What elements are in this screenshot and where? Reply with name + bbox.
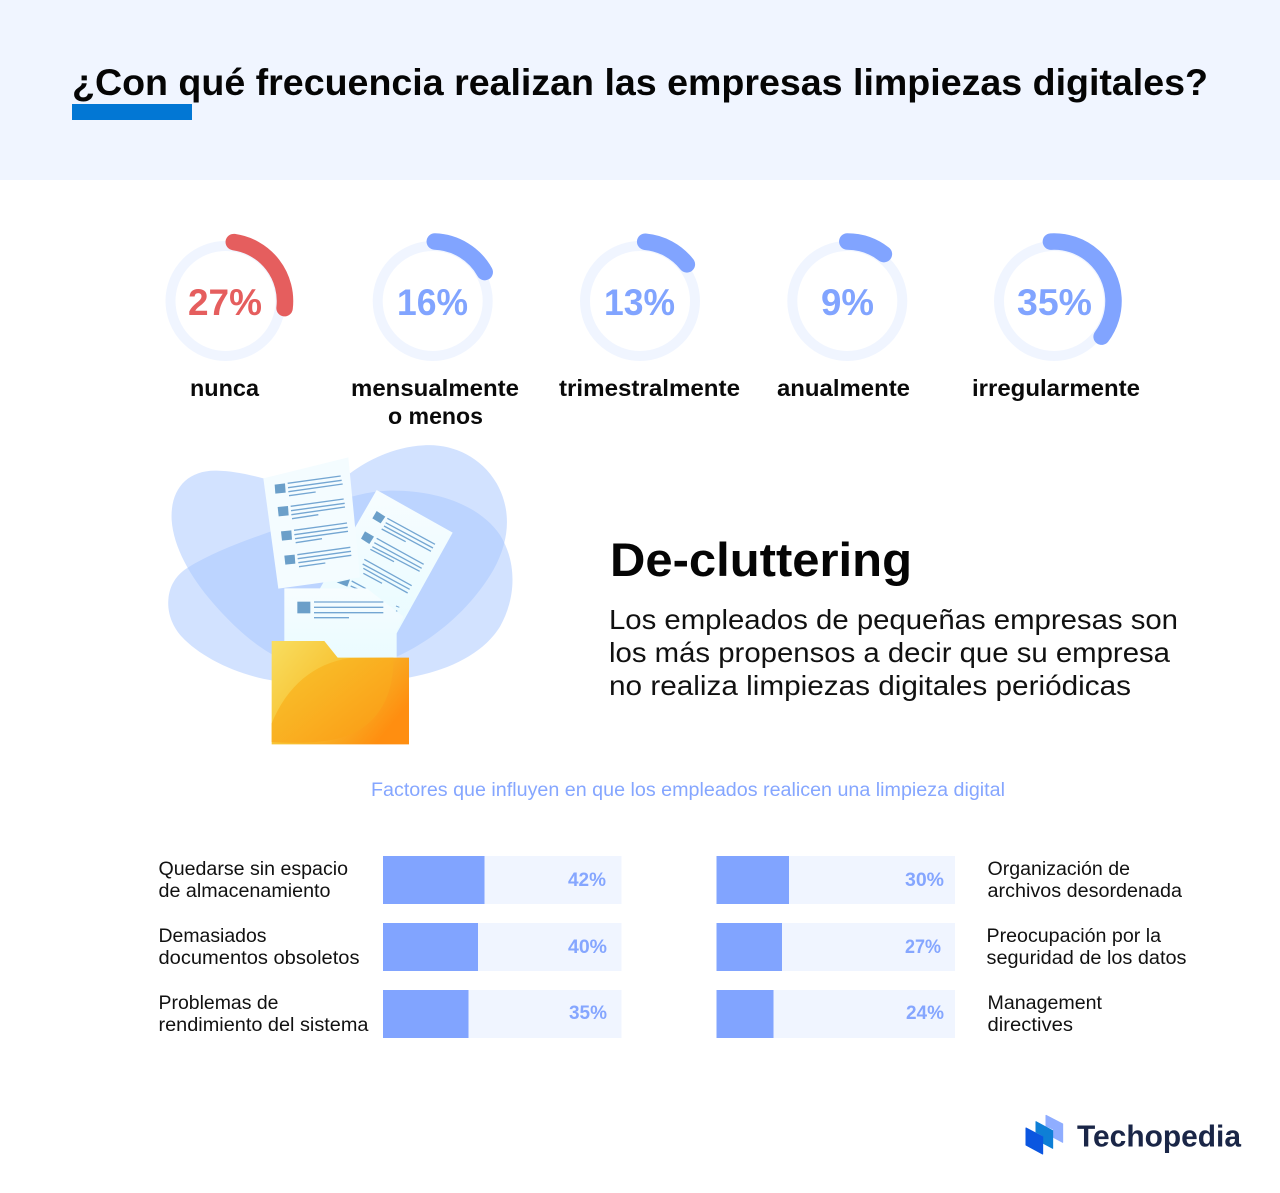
bar row: 35% [158, 990, 622, 1038]
label: mensualmente o menos: o menos [388, 403, 483, 429]
donut: nunca 27%: 27% [188, 282, 262, 323]
logo: Techopedia [1026, 1115, 1242, 1154]
bar row: 24% [716, 990, 1103, 1038]
paper: rotated right [320, 490, 453, 633]
bar row: 27% [716, 923, 1186, 971]
folder front highlight [272, 658, 393, 743]
bar row: 35%: Problemas de [158, 993, 278, 1014]
bar row: 42% [158, 856, 622, 904]
bar row: 35%: rendimiento del sistema [158, 1015, 369, 1036]
bar row: 27%: 27% [905, 937, 941, 958]
paper: upper left [263, 457, 360, 589]
bar row: 40%: documentos obsoletos [158, 948, 360, 969]
bar row: 30%: Organización de [988, 859, 1130, 880]
label: mensualmente o menos [351, 375, 519, 429]
donut: mensualmente 16%: 16% [397, 282, 468, 323]
bar row: 42%: Quedarse sin espacio [158, 859, 348, 880]
chart subtitle: Factores que influyen en que los empleados realicen una limpieza digital [371, 780, 1005, 801]
donut: trimestralmente 13%: 13% [604, 282, 675, 323]
panel: frequency donuts [158, 234, 1140, 429]
folder [272, 641, 409, 744]
text block: description [609, 604, 1178, 701]
bar row: 42%: 42% [568, 870, 606, 891]
illustration: documents and folder [168, 445, 512, 744]
donut: anualmente 9% [788, 242, 907, 360]
donut: anualmente 9%: 9% [821, 282, 874, 323]
text block: description: no realiza limpiezas digitales periódicas [609, 670, 1131, 701]
text block: description: los más propensos a decir que su empresa [609, 637, 1170, 668]
bar row: 30%: 30% [905, 870, 944, 891]
label: irregularmente: irregularmente [972, 375, 1140, 401]
bar row: 24%: directives [988, 1015, 1073, 1036]
heading: De-cluttering: De-cluttering [610, 533, 912, 586]
bar row: 40%: Demasiados [158, 926, 266, 947]
bar row: 30% [716, 856, 1182, 904]
bar row: 30%: archivos desordenada [988, 881, 1182, 902]
bar row: 35%: 35% [569, 1003, 607, 1024]
text block: description: Los empleados de pequeñas empresas son [609, 604, 1178, 635]
label: mensualmente o menos: mensualmente [351, 375, 519, 401]
header band [0, 0, 1280, 180]
title accent bar [72, 104, 192, 120]
bar row: 27%: Preocupación por la [986, 926, 1161, 947]
bar row: 42%: de almacenamiento [158, 881, 330, 902]
bar row: 24%: Management [988, 993, 1103, 1014]
label: trimestralmente: trimestralmente [559, 375, 740, 401]
bar chart: left column [158, 856, 622, 1038]
label: anualmente: anualmente [777, 375, 910, 401]
bar row: 24%: 24% [906, 1003, 944, 1024]
donut: irregularmente 35% [991, 238, 1117, 364]
paper: lower in folder [284, 588, 403, 663]
donut: irregularmente 35%: 35% [1017, 282, 1092, 323]
icon: stacked pages [1026, 1115, 1063, 1154]
bar row: 40% [158, 923, 622, 971]
title: ¿Con qué frecuencia realizan las empresas limpiezas digitales? [72, 62, 1208, 103]
donut: mensualmente 16% [371, 239, 494, 363]
label: nunca: nunca [190, 375, 259, 401]
bar row: 40%: 40% [568, 937, 607, 958]
background blobs [168, 445, 512, 684]
donut: trimestralmente 13% [576, 237, 704, 365]
donut: nunca 27% [158, 234, 293, 368]
bar chart: right column [716, 856, 1186, 1038]
logo: Techopedia: Techopedia [1077, 1118, 1242, 1154]
bar row: 27%: seguridad de los datos [986, 948, 1186, 969]
